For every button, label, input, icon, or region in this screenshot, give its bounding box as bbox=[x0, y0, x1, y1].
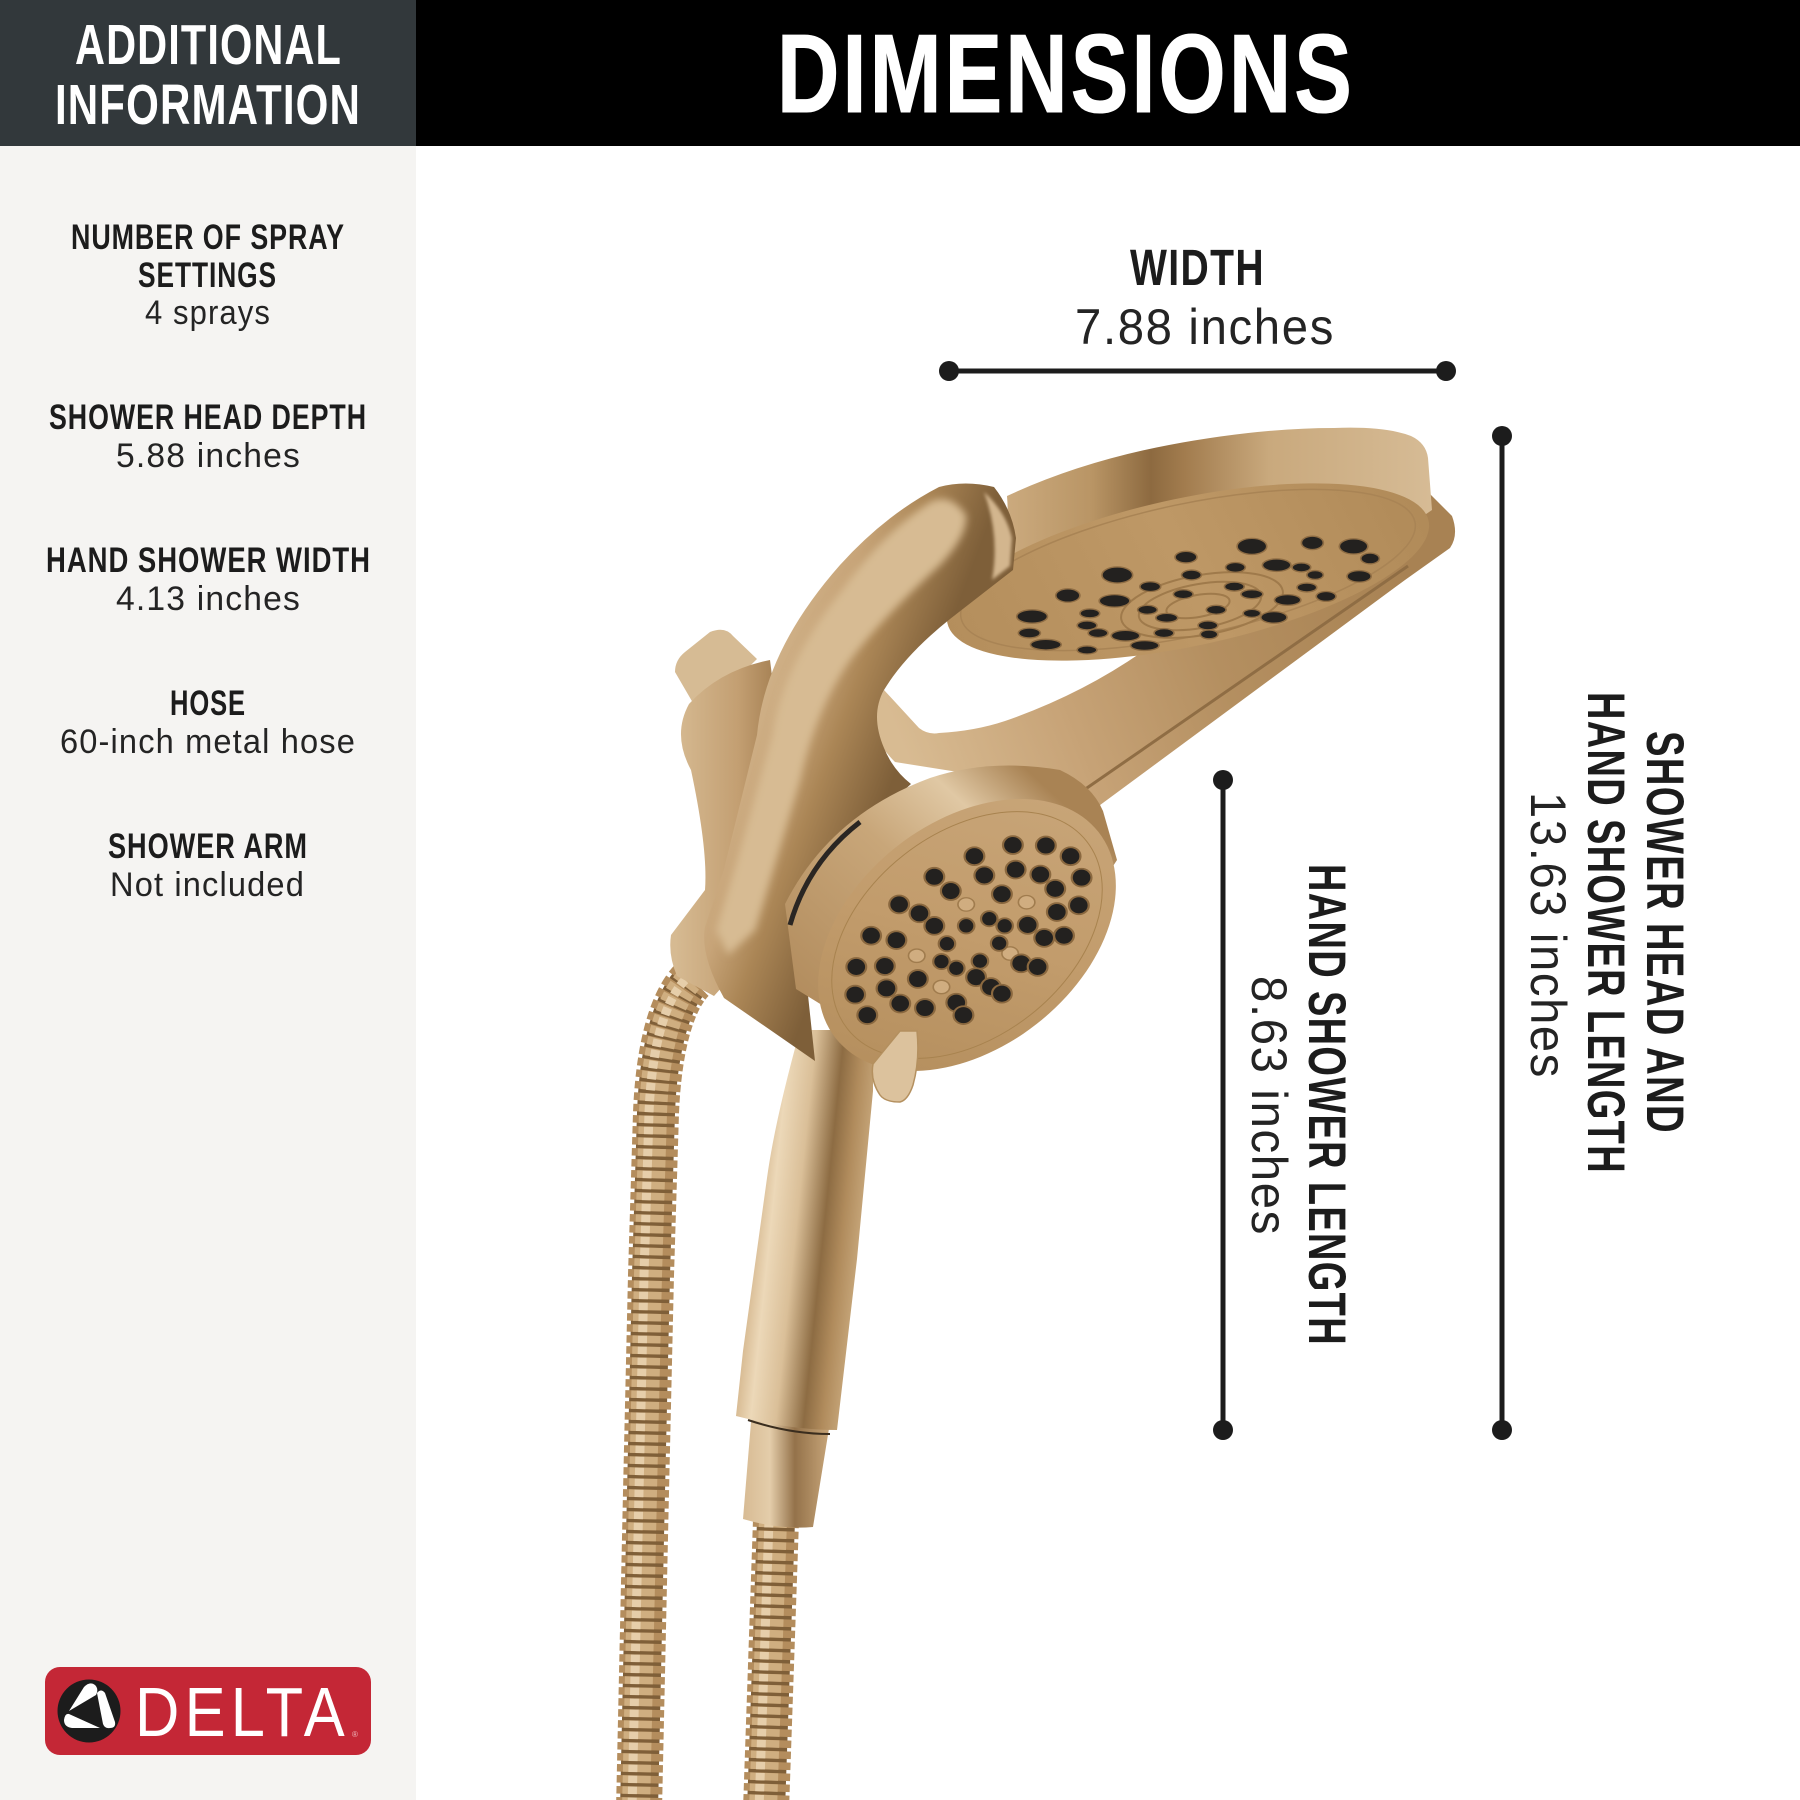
hand shower back shell bbox=[785, 766, 1117, 1040]
hand shower nozzles bbox=[845, 836, 1091, 1024]
logo: Delta bbox=[45, 1667, 371, 1755]
icon: Delta triangle mark bbox=[58, 1680, 120, 1742]
hand shower length label: HAND SHOWER LENGTH bbox=[1297, 864, 1356, 1346]
overall length label bbox=[1520, 692, 1694, 1174]
spec: number of spray settings: NUMBER OF SPRAY bbox=[71, 218, 345, 257]
width label: WIDTH bbox=[1130, 239, 1265, 296]
spray rings bbox=[1116, 561, 1288, 649]
spec: shower arm bbox=[108, 827, 308, 904]
overall length label: HAND SHOWER LENGTH bbox=[1576, 692, 1635, 1174]
hand shower measure line bbox=[1213, 770, 1233, 1440]
right metal hose bbox=[759, 1520, 776, 1800]
spec: shower arm: SHOWER ARM bbox=[108, 827, 308, 866]
spec: hand shower width: HAND SHOWER WIDTH bbox=[46, 541, 371, 580]
spec: hand shower width: 4.13 inches bbox=[116, 580, 301, 618]
dimension: overall length bbox=[1492, 426, 1694, 1440]
sidebar heading bbox=[0, 0, 416, 146]
width label bbox=[1075, 239, 1335, 355]
title bar: dimensions bbox=[416, 0, 1800, 146]
rain head rim bbox=[1000, 428, 1432, 600]
left metal hose bbox=[632, 980, 692, 1800]
dimension: width bbox=[939, 239, 1456, 381]
hand shower length label bbox=[1241, 864, 1356, 1346]
spec: shower head depth bbox=[49, 398, 367, 475]
rain head face bbox=[932, 448, 1444, 696]
spec: number of spray settings: SETTINGS bbox=[138, 256, 277, 295]
blade edge line bbox=[1084, 566, 1408, 790]
overall length label: 13.63 inches bbox=[1520, 792, 1576, 1079]
hand shower length label: 8.63 inches bbox=[1241, 976, 1297, 1236]
title bar: dimensions: DIMENSIONS bbox=[777, 12, 1355, 136]
width measure line bbox=[939, 361, 1456, 381]
hand shower face bbox=[766, 743, 1168, 1127]
overall length label: SHOWER HEAD AND bbox=[1635, 731, 1694, 1134]
logo: Delta: DELTA bbox=[135, 1673, 350, 1751]
collar bbox=[743, 1410, 832, 1528]
rain head nozzles bbox=[1017, 536, 1379, 654]
spray selector tab bbox=[872, 1031, 918, 1102]
product: shower head and hand shower bbox=[632, 428, 1455, 1800]
spec: hose: 60-inch metal hose bbox=[60, 723, 356, 761]
spec: shower head depth: 5.88 inches bbox=[116, 437, 301, 475]
spec: hose bbox=[60, 684, 356, 761]
sidebar heading: INFORMATION bbox=[55, 73, 361, 137]
sidebar heading: ADDITIONAL bbox=[75, 13, 342, 77]
spec: hand shower width bbox=[46, 541, 371, 618]
spec: shower arm: Not included bbox=[110, 866, 305, 904]
overall length measure line bbox=[1492, 426, 1512, 1440]
hand shower secondary gold jets bbox=[908, 896, 1035, 994]
width label: 7.88 inches bbox=[1075, 299, 1335, 355]
spec: number of spray settings: 4 sprays bbox=[145, 294, 271, 332]
rain head mounting blade bbox=[872, 494, 1455, 811]
spec: hose: HOSE bbox=[170, 684, 246, 723]
wall mount elbow bbox=[670, 630, 800, 996]
spec: shower head depth: SHOWER HEAD DEPTH bbox=[49, 398, 367, 437]
panel: additional information sidebar bbox=[0, 0, 416, 1800]
logo: Delta: ® bbox=[352, 1730, 358, 1739]
dimension: hand shower length bbox=[1213, 770, 1356, 1440]
handle bbox=[736, 1030, 873, 1434]
front curved arm bbox=[704, 484, 1016, 1061]
spec: number of spray settings bbox=[71, 218, 345, 332]
